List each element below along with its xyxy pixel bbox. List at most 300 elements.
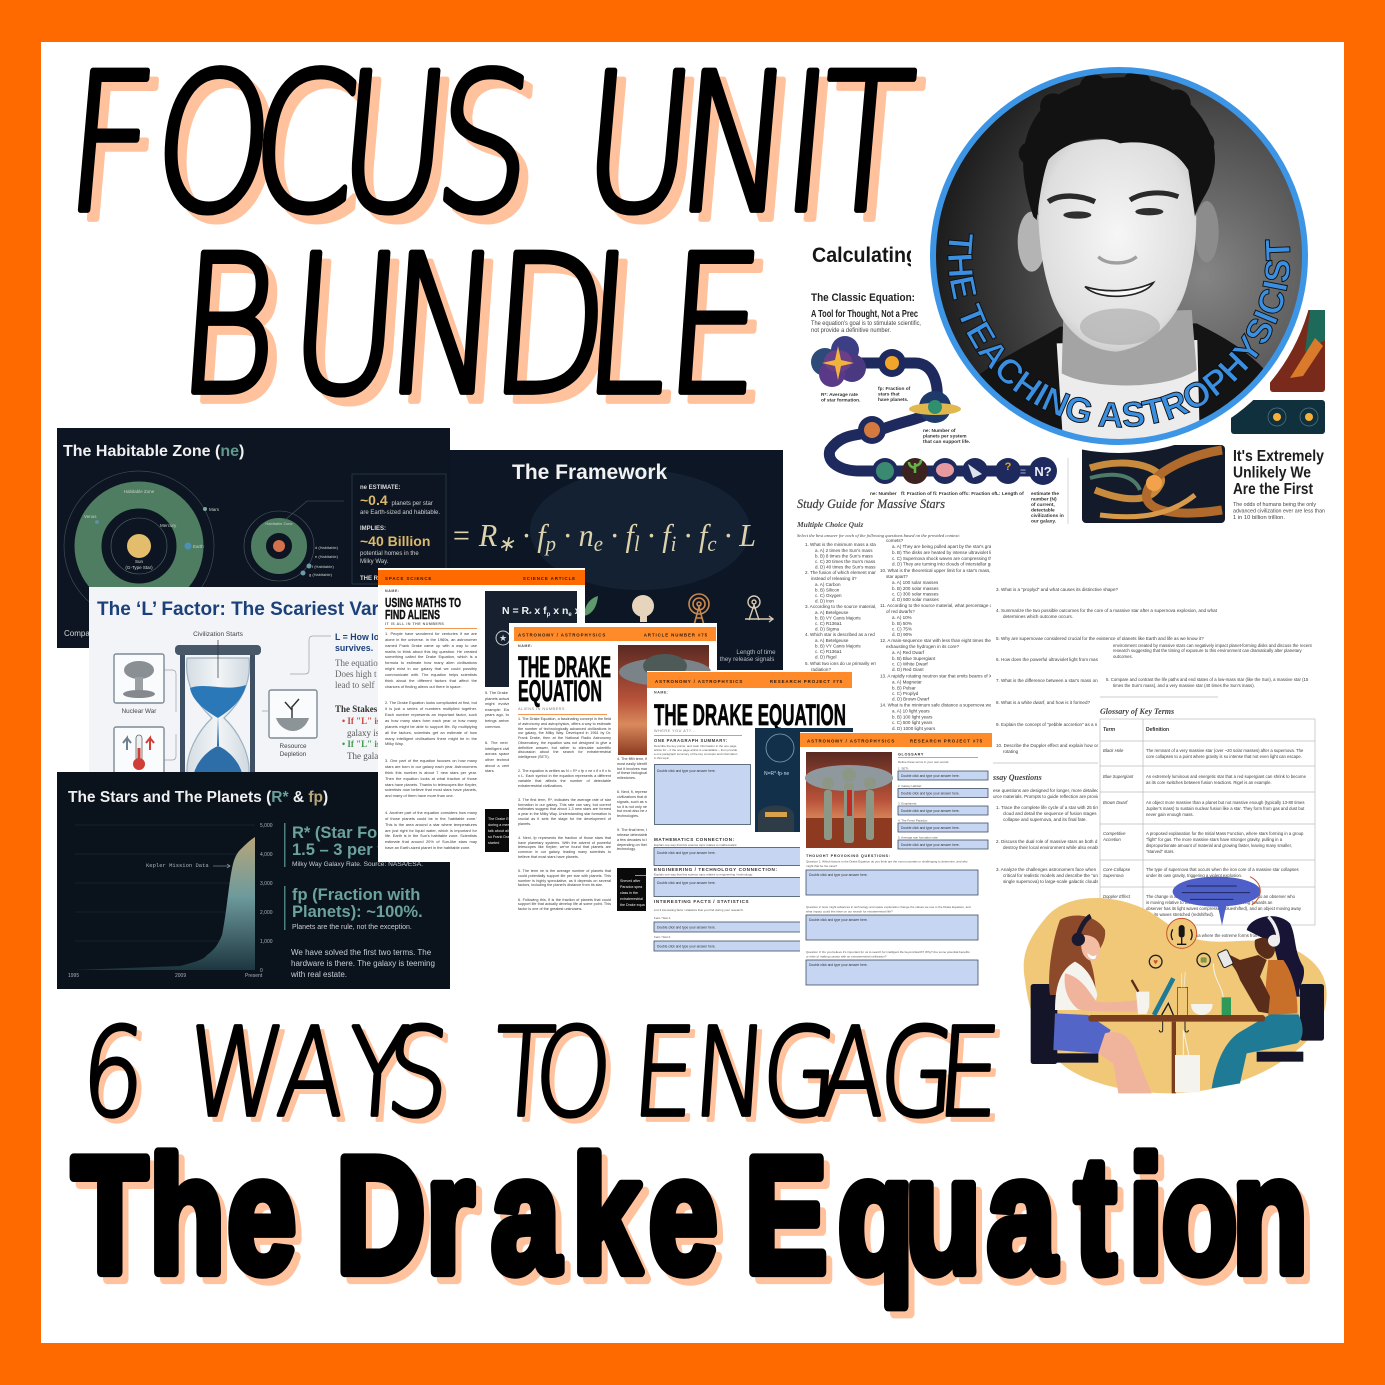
black callout: class in the xyxy=(620,891,638,895)
glossary table: disproportionate amount of material and growing faster, leaving many smaller, xyxy=(1146,843,1292,848)
article body text: 3. The first term, R*, indicates the average rate of star formation in our galaxy. This rate can vary, but current estimates suggest that about 1-3 new stars are formed a year in the Milky Way. Understanding star formation is crucial as it sets the stage for the development of planets. xyxy=(518,798,611,826)
first civilization text: advanced civilization ever are less than xyxy=(1233,508,1325,514)
solar system diagram: Sun xyxy=(135,559,143,564)
essay questions: collapse and supernova, and its final fate. xyxy=(1003,817,1087,822)
drake equation formula: i xyxy=(671,531,676,556)
summary section: in this topic. xyxy=(654,756,670,760)
glossary table: has its waves stretched (redshifted). xyxy=(1146,912,1214,917)
side text: L = How lo xyxy=(335,632,380,642)
first civilization text: It's Extremely xyxy=(1233,448,1324,465)
glossary section: Double click and type your answer here. xyxy=(901,809,960,813)
left chair xyxy=(1031,984,1098,1064)
nose shadow xyxy=(1098,257,1137,263)
worksheet: research project xyxy=(647,671,853,961)
solar system diagram: (G-Type Star) xyxy=(125,565,153,570)
icon: heart reaction: ♥ xyxy=(1153,957,1158,966)
essay questions: urce materials. Prompts to guide reflection are provid xyxy=(993,794,1100,799)
orange header: SCIENCE ARTICLE xyxy=(523,576,576,581)
solar system diagram: Mars xyxy=(209,507,220,512)
summary section: Double click and type your answer here. xyxy=(657,769,716,773)
sun with planets xyxy=(878,349,906,377)
estimate box: are Earth-sized and habitable. xyxy=(360,510,440,516)
short answer questions: 4. Summarize the two possible outcomes for the core of a massive star after a supernova explosion, and what xyxy=(996,608,1218,613)
short answer questions xyxy=(996,587,1218,754)
icon: leaf xyxy=(584,596,598,616)
glossary table xyxy=(1100,719,1315,938)
side text xyxy=(335,632,381,761)
first civilization text xyxy=(1233,448,1325,521)
quiz column one: b. B) VY Canis Majoris xyxy=(815,644,861,648)
essay questions: single supernova) to large-scale galactic clouds xyxy=(1003,879,1099,884)
drake equation formula: · n xyxy=(556,517,594,553)
worksheet: research project: NAME: xyxy=(654,690,669,694)
curved badge text: THE TEACHING ASTROPHYSICIST xyxy=(947,234,1290,428)
R star text block xyxy=(284,823,423,868)
quiz column two: comets? xyxy=(886,538,904,543)
quiz column two: a. A) 10% xyxy=(892,615,912,620)
article side column: a few decades to bi xyxy=(617,838,649,842)
quiz column two: b. B) Pulsar xyxy=(892,686,916,690)
glossary section: Double click and type your answer here. xyxy=(901,843,960,847)
exoplanet area chart: 5,000 xyxy=(260,823,273,829)
orange header: RESEARCH PROJECT #75 xyxy=(910,738,983,744)
quiz column two: d. D) 1000 light years xyxy=(892,726,936,731)
black callout xyxy=(485,809,555,852)
equation image panel xyxy=(485,591,581,687)
exoplanet area chart: 1995 xyxy=(68,973,79,979)
glossary table: core collapses to a point where gravity is so intense that not even light can escape. xyxy=(1146,754,1302,759)
factor labels: planets per system xyxy=(923,434,966,440)
icon: brain xyxy=(632,595,654,622)
quiz column two: c. C) 75% xyxy=(892,626,912,632)
factor labels: stars that xyxy=(878,392,900,398)
article column two: 5. The Drake Equation also asks how many of those planets actually develop life, and how many of those might evolve intelligence. We only have one example: Earth. Life appeared about 3.5 billion years ago, but it took a long time before intelligent beings arrived, which means life could be rare or common. xyxy=(485,690,577,729)
caption: Compa xyxy=(64,629,90,638)
R star text block: 1.5 – 3 per y xyxy=(292,841,387,859)
drake equation formula: · f xyxy=(640,517,675,553)
ears xyxy=(1018,212,1046,272)
quiz column two: c. C) White Dwarf xyxy=(892,662,928,666)
quiz column two: a. A) 10 light years xyxy=(892,708,930,714)
essay continuation text xyxy=(1106,643,1313,688)
glossary section: 2. Galaxy Habitat: xyxy=(898,784,922,788)
slide: The Stars and The Planets xyxy=(57,772,450,989)
slide: The Habitable Zone xyxy=(57,428,450,648)
title: FOCUS UNIT: FOCUS UNIT xyxy=(58,34,921,255)
exoplanet area chart: 1,000 xyxy=(260,939,273,945)
main title: The Drake Equation: The Drake Equation xyxy=(72,1123,1308,1307)
black callout: The Drake Equation was xyxy=(488,817,529,821)
equation image panel: * xyxy=(529,612,532,618)
glossary table: A proposed explanation for the Initial Mass Function, where stars forming in a group xyxy=(1146,831,1304,836)
orange header: SPACE SCIENCE xyxy=(385,576,432,581)
red dwarf system diagram: d (Habitable) xyxy=(315,545,339,550)
thought provoking questions: Question 3: Do you believe it's important for us to search for intelligent life beyond Earth? Why? Are some potential benefits xyxy=(806,950,970,954)
factor labels: have planets. xyxy=(878,397,908,403)
glossary table: is moving relative to the wave source. An object moving towards an xyxy=(1146,900,1273,905)
article side column: depending on their xyxy=(617,842,648,846)
caption: Length of time xyxy=(736,649,776,656)
quiz column one: d. D) Sigma xyxy=(815,626,839,632)
article: The Drake Equation aliens in numbers xyxy=(509,623,717,915)
article column two xyxy=(485,690,577,808)
worksheet: glossary and questions xyxy=(800,732,993,990)
podcast illustration xyxy=(1024,877,1327,1093)
essay questions: ese questions are designed for longer, more detailed xyxy=(993,788,1099,793)
engineering connection: ENGINEERING / TECHNOLOGY CONNECTION: xyxy=(654,867,778,872)
orange header: ASTRONOMY / ASTROPHYSICS xyxy=(807,738,895,744)
winding road infographic xyxy=(811,336,1057,485)
glossary table: Accretion xyxy=(1102,837,1121,842)
quiz column two: a. A) 100 solar masses xyxy=(892,580,939,585)
fp text block xyxy=(284,886,423,931)
article: Using Maths to Find Aliens xyxy=(378,568,585,862)
worksheet headline: THE DRAKE EQUATION xyxy=(654,699,846,732)
factor labels: our galaxy. xyxy=(1031,518,1056,524)
heading: The Habitable Zone (ne) xyxy=(63,443,244,460)
solar system diagram: Habitable Zone xyxy=(124,489,155,494)
image: observatory xyxy=(755,728,853,832)
essay questions: ssay Questions xyxy=(992,773,1042,782)
row of factors: N? xyxy=(1034,464,1052,479)
quiz column two: b. B) 50% xyxy=(892,621,912,626)
interesting facts: List 3 interesting facts / statistics that you find during your research: xyxy=(654,908,744,912)
side text: survives. xyxy=(335,643,373,653)
summary section xyxy=(654,738,750,824)
glossary table: Term xyxy=(1103,727,1116,733)
summary text: hardware is there. The galaxy is teeming xyxy=(291,959,435,968)
ringed planet xyxy=(858,416,886,444)
quiz column two: b. B) 100 light years xyxy=(892,714,933,720)
R star text block: Milky Way Galaxy Rate. Source: NASA/ESA. xyxy=(292,861,423,868)
quiz column two: d. D) They are turning into clouds of interstellar gas. xyxy=(892,562,996,566)
arrows to hourglass xyxy=(164,636,331,760)
neck and face xyxy=(1038,139,1196,352)
quiz column one: b. B) Silicon xyxy=(815,588,840,592)
factor labels: L: Length of xyxy=(996,491,1024,497)
exoplanet area chart: Kepler Mission Data xyxy=(146,862,209,869)
side text: galaxy is xyxy=(347,728,380,738)
hair xyxy=(1023,77,1215,220)
glossary section: Double click and type your answer here. xyxy=(901,826,960,830)
quiz column two: b. B) 200 solar masses xyxy=(892,586,939,591)
icon: tower with arrow xyxy=(745,596,773,622)
drake equation formula: · f xyxy=(603,517,638,553)
first civilization text: 1 in 10 billion trillion. xyxy=(1233,515,1285,521)
image: twin star systems xyxy=(1231,400,1325,434)
article body text: 4. Another part of the equation considers how many of those planets could be in the 'habitable zone.' This is the area around a star where temperatures are just right for liquid water, which is important for life. Earth is in the Sun's habitable zone. Scientists estimate that around 20% of Sun-like stars may have an Earth-sized planet in the habitable zone. xyxy=(385,810,477,850)
essay continuation text: 5. Compare and contrast the life paths and end states of a low-mass star (like the Sun), a massive star (15 xyxy=(1106,677,1309,682)
article side column: milestones. xyxy=(617,776,636,780)
orange header: ASTRONOMY / ASTROPHYSICS xyxy=(518,632,606,638)
study guide heading: Study Guide for Massive Stars xyxy=(797,496,945,511)
quiz column two: a. A) They are being pulled apart by the star's gravity. xyxy=(892,544,999,549)
glossary table: as its core switches between fusion reactions. Rigel is an example. xyxy=(1146,780,1272,785)
icon: heart reaction xyxy=(1149,955,1162,968)
exoplanet area chart: Present xyxy=(245,973,263,979)
glossary table: The remnant of a very massive star (over ~20 solar masses) after a supernova. The xyxy=(1146,748,1304,753)
thought provoking questions: Question 2: How might advances in technology and space exploration change the values we use in the Drake Equation, and xyxy=(806,905,971,909)
factor labels: R*: Average rate xyxy=(821,392,858,398)
thought provoking questions: Double click and type your answer here. xyxy=(809,918,868,922)
quiz column two: a. A) Magnetar xyxy=(892,680,922,684)
glossary section: 3. Exoplanets: xyxy=(898,802,917,806)
drake equation formula: = R xyxy=(451,517,500,553)
suit xyxy=(980,323,1264,430)
slide: Calculating the classic equation xyxy=(811,240,1325,524)
thought provoking questions: might that be the case? xyxy=(806,864,838,868)
factor labels: fp: Fraction of xyxy=(878,386,911,392)
short answer questions: 6. How does the powerful ultraviolet light from mas xyxy=(996,657,1099,662)
icon: resource depletion: Resource xyxy=(280,743,307,750)
article side column: technologies. xyxy=(617,814,639,818)
estimate box: THE R xyxy=(360,576,379,582)
short answer questions: 7. What is the difference between a star's mass on xyxy=(996,678,1098,683)
quiz column one: d. D) Iron xyxy=(815,598,834,604)
icon: climate thermometer xyxy=(114,727,164,773)
quiz column one: a. A) Betelgeuse xyxy=(815,638,849,643)
image: volcanic planet xyxy=(1270,310,1325,392)
glossary table: under its own gravity, triggering a violent explosion. xyxy=(1146,873,1242,878)
drake equation formula: l xyxy=(634,531,640,556)
glossary section: GLOSSARY xyxy=(898,752,924,756)
row of factors xyxy=(872,457,1057,485)
article body text: 1. The Drake Equation, a fascinating concept in the field of astronomy and astrophysics, offers a way to estimate the number of technologically advanced civilizations in our galaxy, the Milky Way. Developed in 1961 by Dr. Frank Drake, then at the National Radio Astronomy Observatory, the equation was not designed to give a definitive answer, but rather to stimulate scientific discussion about the search for extraterrestrial intelligence (SETI). xyxy=(518,717,611,759)
quiz column one: d. D) 40 times the Sun's mass xyxy=(815,564,876,570)
slide: The L Factor xyxy=(89,587,389,773)
orange header: ARTICLE NUMBER #75 xyxy=(644,632,708,638)
quiz column two: a. A) Red Dwarf xyxy=(892,650,925,655)
glossary section: Double click and type your answer here. xyxy=(901,792,960,796)
equation image panel: x n xyxy=(550,605,568,617)
quiz column one: instead of releasing it? xyxy=(811,576,857,581)
glossary section: Define these terms in your own words: xyxy=(898,760,949,764)
glossary section xyxy=(898,752,988,849)
quiz column one: c. C) 20 times the Sun's mass xyxy=(815,559,876,564)
essay questions: cloud and detail the sequence of fusion stages i xyxy=(1003,811,1099,816)
drake equation formula: c xyxy=(707,531,717,556)
article body text: 4. Next, fp represents the fraction of those stars that have planetary systems. With the advent of powerful telescopes like Kepler, we've found that planets are common in our galaxy, leading many scientists to believe that most stars have planets. xyxy=(518,836,611,859)
mathematics connection: Explain one way that this science topic relates to mathematics: xyxy=(654,843,737,847)
smile xyxy=(1085,283,1153,296)
quiz column one: b. B) 8 times the Sun's mass xyxy=(815,554,873,558)
short answer questions: 3. What is a "proplyd" and what causes its distinctive shape? xyxy=(996,587,1118,592)
heading: The ‘L’ Factor: The Scariest Var xyxy=(97,599,380,620)
black callout: Paradox spea xyxy=(620,885,642,889)
glossary table: Definition xyxy=(1146,727,1169,733)
summary section: article for – if the one page article is unavailable – then provide xyxy=(654,748,738,752)
side text: Does high t xyxy=(335,669,377,679)
fp text block: fp (Fraction with xyxy=(292,886,420,904)
quiz column one: 3. According to the source material, xyxy=(805,604,876,609)
thought provoking questions: Double click and type your answer here. xyxy=(809,963,868,967)
factor labels: civilizations in xyxy=(1031,513,1064,519)
tool for thought text: not provide a definitive number. xyxy=(811,328,891,334)
sub heading: The Classic Equation: xyxy=(811,292,915,304)
engineering connection: Explain one way that this science topic relates to engineering / technology: xyxy=(654,872,753,876)
interesting facts: Fact / Stat 2: xyxy=(654,935,671,939)
article body text: 6. Following this, fl is the fraction of planets that could support life that actually develop life at some point. This factor is one of the greatest unknowns. xyxy=(518,898,611,911)
quiz column two: d. D) 90% xyxy=(892,632,912,637)
exoplanet area chart xyxy=(68,823,273,979)
portrait badge xyxy=(930,67,1308,445)
eyes xyxy=(1063,211,1091,219)
row of factors: ? xyxy=(1005,461,1012,473)
quiz column two: of red dwarfs? xyxy=(886,609,915,614)
table and items xyxy=(1088,972,1265,1093)
article headline: USING MATHS TO xyxy=(385,595,461,610)
black callout: talk about aliens xyxy=(488,829,515,833)
image: observatory: N=R*·fp·ne xyxy=(764,771,789,777)
tool for thought text: The equation's goal is to stimulate scientific, xyxy=(811,321,921,327)
equation image panel: x xyxy=(572,605,581,617)
quiz column two: c. C) Supernova shock waves are compressing them into that shape. xyxy=(892,556,1031,561)
interesting facts: Double click and type your answer here. xyxy=(657,944,716,948)
R star text block: R* (Star For xyxy=(292,824,384,842)
glossary table: Jupiter's mass) to sustain nuclear fusion like a star. They form from gas and dust but xyxy=(1146,806,1305,811)
orange header xyxy=(514,627,716,641)
glossary table: An object more massive than a planet but not massive enough (typically 13-80 times xyxy=(1146,800,1305,805)
essay questions: 3. Analyze the challenges astronomers face when xyxy=(996,867,1097,872)
article body text: 2. The Drake Equation looks complicated at first, but it is just a series of numbers multiplied together. Each number represents an important factor, such as how many stars form each year or how many planets might be able to support life. By multiplying all the factors, scientists get an estimate of how many intelligent civilisations there might be in the Milky Way. xyxy=(385,700,477,746)
mathematics connection: Double click and type your answer here. xyxy=(657,851,716,855)
row of factors: = xyxy=(1020,467,1026,478)
summary text: with real estate. xyxy=(290,970,347,979)
black callout: so Frank Drake xyxy=(488,835,513,839)
quiz column two: b. B) The disks are heated by intense ultraviolet light, which drives material away xyxy=(892,550,1055,555)
factor labels: ne: Number xyxy=(870,491,897,497)
side text: The equatio xyxy=(335,658,378,668)
factor labels: fl: Fraction of xyxy=(901,491,932,497)
star cloud xyxy=(811,336,866,387)
article body text: 1. People have wondered for centuries if we are alone in the universe. In the 1960s, an astronomer named Frank Drake came up with a way to use maths to think about this big question. He created something called the Drake Equation, which is a formula to estimate how many alien civilisations might exist in our galaxy that we could possibly communicate with. The equation helps scientists think about the different factors that affect the chances of finding aliens out there in space. xyxy=(385,631,477,689)
article body text: 2. The equation is written as N = R* x fp x ne x fl x fi x fc x L. Each symbol in the equation represents a different variable that affects the number of detectable extraterrestrial civilizations. xyxy=(518,769,611,788)
quiz column two: d. D) 500 solar masses xyxy=(892,597,939,602)
estimate box: ~0.4 planets per star xyxy=(360,492,433,508)
short answer questions: 5. Why are supernovae considered crucial for the existence of planets like Earth and life as we know it? xyxy=(996,636,1204,641)
factor labels: fi: Fraction of xyxy=(933,491,964,497)
glossary table: Brown Dwarf xyxy=(1103,800,1128,805)
icon: microphone xyxy=(1167,918,1197,948)
factor labels: number (N) xyxy=(1031,496,1057,502)
quiz column two: c. C) 300 solar masses xyxy=(892,592,939,596)
worksheet: research project: WHERE YOU AT?... xyxy=(654,729,696,733)
stubble xyxy=(1080,308,1160,345)
essay continuation text: research suggesting that the timing of exposure to this environment can dramatically alter planetary xyxy=(1113,648,1303,653)
icon: radio tower xyxy=(689,594,709,625)
quiz column two: 13. A rapidly rotating neutron star that emits beams of X xyxy=(880,674,992,678)
icon: nuclear war xyxy=(114,654,164,715)
ringed earth xyxy=(909,391,961,423)
factor labels: of star formation. xyxy=(821,398,860,404)
quiz column one: 5. What two ions do uv primarily emit xyxy=(805,661,880,666)
quiz column two: d. D) Red Giant xyxy=(892,667,924,672)
summary text: We have solved the first two terms. The xyxy=(291,948,432,957)
article side column xyxy=(617,757,649,867)
glossary table: Black Hole xyxy=(1103,748,1124,753)
white halo around portrait xyxy=(922,59,1316,453)
quiz column one: 2. The fusion of which element mark xyxy=(805,570,879,575)
red dwarf system diagram: Habitable Zone xyxy=(265,521,293,526)
quiz column two: 10. What is the theoretical upper limit for a star's mass, beyond which the radiation produced by fusion blows the xyxy=(880,568,1107,573)
heading: The Stars and The Planets (R* & fp) xyxy=(68,789,328,806)
factor labels: detectable xyxy=(1031,508,1055,514)
engineering connection: Double click and type your answer here. xyxy=(657,881,716,885)
article headline xyxy=(385,595,461,622)
quiz column two: 14. What is the minimum safe distance a supernova wo xyxy=(880,702,992,708)
left person xyxy=(1049,916,1152,1093)
quiz column two: c. C) Proplyd xyxy=(892,691,919,696)
slide heading: Calculating xyxy=(812,244,918,267)
right person xyxy=(1212,916,1304,1088)
interesting facts: Fact / Stat 1: xyxy=(654,916,671,920)
thought provoking questions: what impact could this have on our search for extraterrestrial life? xyxy=(806,910,893,914)
eyebrows xyxy=(1048,196,1095,202)
glossary table: Doppler Effect xyxy=(1103,894,1131,899)
mathematics connection xyxy=(654,837,814,866)
essay questions: 1. Trace the complete life cycle of a star with 25 tim xyxy=(996,805,1099,810)
side text: The gala xyxy=(347,751,378,761)
yellow blob xyxy=(1024,898,1327,1093)
essay questions xyxy=(992,773,1101,884)
orange header xyxy=(800,733,992,747)
estimate box xyxy=(352,474,446,584)
shirt xyxy=(1057,340,1200,447)
mathematics connection: MATHEMATICS CONNECTION: xyxy=(654,837,735,842)
article side column: technology. xyxy=(617,847,636,851)
orange header: RESEARCH PROJECT #75 xyxy=(770,679,843,684)
orange header xyxy=(378,570,585,585)
neck xyxy=(1062,310,1197,385)
study guide document: Select the best answer for each of the following questions based on the provided context: xyxy=(797,533,961,538)
quiz column one xyxy=(805,542,880,672)
essay continuation text: times the Sun's mass), and a very massive star (40 times the Sun's mass). xyxy=(1113,683,1255,688)
speech bubble xyxy=(1173,877,1261,925)
quiz column one: a. A) Betelgeuse xyxy=(815,610,849,615)
essay questions: destroy their local environment while also enabl xyxy=(1003,845,1099,850)
article column two: 6. The next step considers how many of those intelligent civilisations would be able to communicate across space, perhaps by using radio signals or other technology. Humans have sent signals for about a century, and they have reached nearby stars. xyxy=(485,740,577,773)
slide: The Framework xyxy=(450,450,783,670)
quiz column two: d. D) Brown Dwarf xyxy=(892,696,930,702)
photo xyxy=(930,67,1310,447)
short answer questions: rotating xyxy=(1003,749,1019,754)
black callout: Sheved after xyxy=(620,879,641,883)
icon: resource depletion xyxy=(269,690,317,758)
article side column: but it involves many xyxy=(617,766,649,770)
article: Using Maths to Find Aliens: IT IS ALL IN THE NUMBERS xyxy=(385,622,444,626)
quiz column two: 11. According to the source material, what percentage of xyxy=(880,603,994,608)
icon: resource depletion: Depletion xyxy=(280,751,307,758)
side text: • If "L" is xyxy=(342,739,381,749)
article body text: 5. The term ne is the average number of planets that could potentially support life per star with planets. This number is highly speculative, as it depends on several factors, including the planet's distance from its star. xyxy=(518,869,611,887)
quiz column two: star apart? xyxy=(886,574,908,579)
article headline: EQUATION xyxy=(518,675,602,708)
exoplanet area chart: 2009 xyxy=(175,973,186,979)
black callout xyxy=(617,868,646,911)
article headline: THE DRAKE xyxy=(518,651,611,684)
estimate box: Milky Way. xyxy=(360,559,389,565)
title: BUNDLE: BUNDLE xyxy=(172,217,769,437)
article side column: of these biological xyxy=(617,771,647,775)
thought provoking questions: THOUGHT PROVOKING QUESTIONS: xyxy=(806,854,891,858)
first civilization text: Unlikely We xyxy=(1233,464,1311,482)
estimate box: ~40 Billion xyxy=(360,533,430,549)
quiz column one: b. B) VY Canis Majoris xyxy=(815,616,861,620)
factor labels: fc: Fraction of xyxy=(964,491,996,497)
summary section: ONE PARAGRAPH SUMMARY: xyxy=(654,738,728,743)
article side column: 9. The final term, L, xyxy=(617,828,649,832)
glossary table: The type of supernova that occurs when the iron core of a massive star collapses xyxy=(1146,867,1299,872)
